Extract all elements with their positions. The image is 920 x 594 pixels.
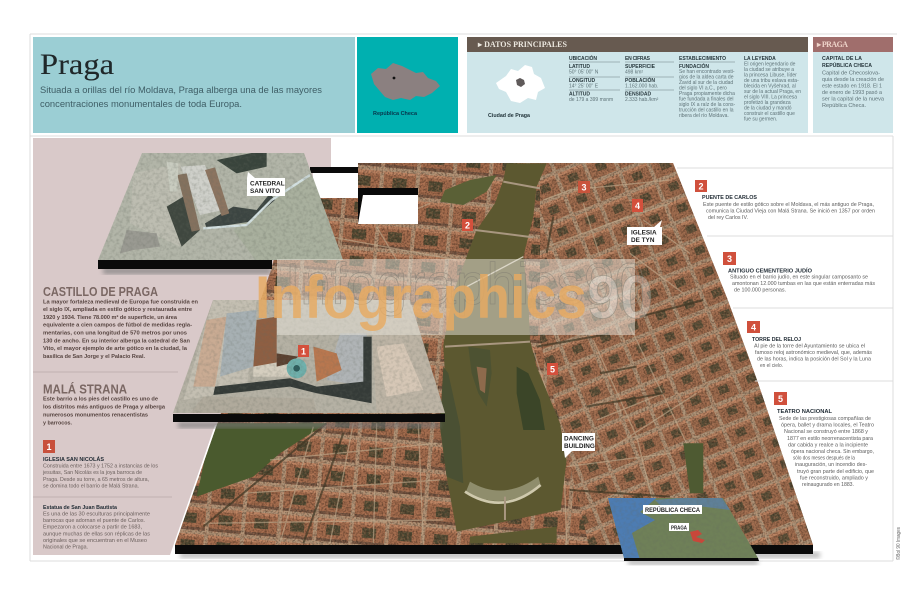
marker 1 on inset: 1 — [301, 346, 306, 356]
column: establecimiento: Zavid al sur de la ciudad — [679, 80, 733, 86]
label: República Checa — [643, 505, 702, 514]
body: Praga. Desde su torre, a 65 metros de altura, — [43, 477, 149, 483]
river Vltava — [440, 163, 567, 532]
label: Praga — [669, 523, 689, 532]
marker 2 — [695, 180, 707, 192]
column: establecimiento — [679, 56, 735, 119]
label: Catedral San Vito: CATEDRAL — [250, 180, 285, 188]
column: establecimiento: siglo IX a raíz de la cons- — [679, 102, 735, 108]
column: ubicación: ALTITUD — [569, 92, 590, 98]
column: ubicación: LONGITUD — [569, 78, 595, 84]
body: aunque muchas de ellas son réplicas de las — [43, 532, 150, 538]
body: Sede de las prestigiosas compañías de — [779, 416, 871, 422]
heading: Estatua de San Juan Bautista — [43, 505, 118, 511]
body — [754, 344, 872, 369]
label: Dancing Building: BUILDING — [564, 443, 595, 450]
text block: Torre del Reloj — [747, 321, 872, 369]
body text: este estado en 1918. El 1 — [822, 84, 882, 90]
body: de las horas, indica la posición del Sol y la Luna — [757, 356, 871, 362]
park — [197, 423, 327, 497]
column: la leyenda: la ciudad se atribuye a — [744, 67, 794, 73]
marker 1: 1 — [46, 442, 52, 452]
body — [42, 464, 158, 490]
column: establecimiento: ESTABLECIMIENTO — [679, 56, 726, 62]
column: ubicación: de 179 a 399 msnm — [569, 97, 613, 103]
column: en cifras: POBLACIÓN — [625, 76, 655, 84]
column: en cifras: 498 km² — [625, 70, 643, 76]
marker 2 — [462, 219, 473, 231]
intro text — [40, 85, 322, 110]
column: establecimiento: Se han encontrado vesti- — [679, 69, 735, 75]
bridges — [445, 182, 540, 520]
marker 2: 2 — [465, 220, 470, 230]
country label: República Checa — [373, 111, 418, 117]
map: city of Prague — [496, 65, 545, 103]
body: 1877 en estilo neorrenacentista para — [787, 436, 873, 442]
icon: Prague dot — [393, 77, 395, 79]
body: se domina todo el barrio de Malá Strana. — [43, 484, 139, 490]
label: Iglesia de Tyn: IGLESIA — [631, 230, 657, 236]
body: ópera nacional checa. Sin embargo, — [791, 449, 874, 455]
column: establecimiento: del siglo VI a.C., pero — [679, 86, 727, 92]
label: Dancing Building: DANCING — [564, 436, 594, 442]
column: ubicación: UBICACIÓN — [569, 54, 597, 62]
column: establecimiento: Praga propiamente dicha — [679, 91, 735, 97]
column: ubicación — [569, 54, 620, 103]
body: los distritos más antiguos de Praga y alberga — [43, 404, 166, 410]
column: la leyenda: el siglo VIII. La princesa — [744, 94, 797, 100]
column: en cifras: DENSIDAD — [625, 92, 652, 98]
islands — [468, 347, 492, 407]
marker 1 on inset — [298, 345, 309, 357]
inset shadow — [103, 268, 271, 274]
column: establecimiento: FUNDACIÓN — [679, 62, 709, 70]
map: Czech Republic — [371, 63, 440, 100]
body: mentarias, con una longitud de 570 metros por unos — [43, 330, 187, 336]
column: en cifras — [625, 56, 674, 103]
text block: Antiguo Cementerio Judío — [723, 252, 875, 294]
white strip cut-out — [310, 167, 358, 198]
body: originales que se encuentran en el Museo — [43, 538, 147, 544]
body: inauguración, un incendio des- — [795, 462, 867, 468]
marker 3 — [578, 181, 590, 193]
body text: Capital de Checoslova- — [822, 70, 880, 76]
body: jesuitas, San Nicolás es la joya barroca de — [42, 470, 142, 476]
marker 5: 5 — [778, 394, 783, 404]
label: República Checa: REPÚBLICA CHECA — [645, 507, 701, 514]
label: Dancing Building — [562, 433, 595, 458]
body: famoso reloj astronómico medieval, que, además — [755, 350, 872, 356]
column: en cifras: SUPERFICIE — [625, 64, 656, 70]
watermark band — [277, 259, 635, 335]
column: la leyenda: de la ciudad y mandó — [744, 106, 792, 112]
panel: Praga capital — [813, 37, 893, 133]
heading: MALÁ STRANA — [43, 382, 128, 396]
title: Praga — [40, 48, 114, 81]
inset: mini map of Czech Republic — [608, 498, 760, 566]
heading: ANTIGUO CEMENTERIO JUDÍO — [728, 266, 813, 274]
map texture — [170, 160, 820, 550]
subheading: REPÚBLICA CHECA — [822, 62, 873, 69]
body — [703, 202, 875, 221]
body: Este barrio a los pies del castillo es uno de — [43, 396, 158, 402]
body text: de enero de 1993 pasó a — [822, 90, 883, 96]
heading: IGLESIA SAN NICOLÁS — [43, 456, 104, 463]
body: Es una de las 30 esculturas principalmente — [43, 512, 150, 518]
text block: Castillo de Praga — [43, 284, 199, 360]
body: sólo dos meses después de la — [793, 456, 855, 462]
body — [730, 274, 875, 294]
body: basílica de San Jorge y el Palacio Real. — [43, 354, 145, 360]
body: Empezaron a colocarse a partir de 1683, — [43, 524, 142, 530]
body: dar cabida y realce a la incipiente — [788, 442, 868, 448]
label: Iglesia de Tyn — [627, 220, 662, 245]
body — [43, 512, 150, 550]
weir — [466, 477, 541, 501]
text block: Puente de Carlos — [695, 180, 875, 221]
heading: TORRE DEL RELOJ — [752, 337, 801, 343]
marker 3: 3 — [727, 254, 732, 264]
body: La mayor fortaleza medieval de Europa fue construida en — [43, 299, 199, 305]
marker 4 — [632, 199, 643, 212]
body: truyó gran parte del edificio, que — [797, 469, 874, 475]
body — [43, 396, 166, 426]
column: en cifras: 2.333 hab./km² — [625, 97, 659, 103]
inset shadow — [178, 422, 440, 428]
heading: CASTILLO DE PRAGA — [43, 284, 159, 299]
body text — [822, 70, 885, 109]
marker 4: 4 — [635, 201, 640, 211]
body: 1920 y 1934. Tiene 78.000 m² de superficie, un área — [43, 314, 178, 321]
heading: ▸ DATOS PRINCIPALES — [477, 40, 568, 49]
panel: left pink background — [33, 138, 331, 555]
inset base edge — [98, 260, 272, 269]
label: Catedral San Vito: SAN VITO — [250, 188, 280, 195]
white hole cut-out — [358, 188, 418, 224]
column: ubicación: LATITUD — [569, 64, 590, 70]
icon: Prague red area — [690, 530, 705, 543]
column: la leyenda: profetizó la grandeza — [744, 100, 791, 106]
body: Nacional se construyó entre 1868 y — [784, 429, 868, 435]
main aerial map of Prague — [170, 160, 820, 558]
body: equivalente a cien campos de fútbol de medidas regla- — [43, 323, 192, 329]
marker 4: 4 — [751, 322, 756, 332]
inset: Catedral San Vito — [90, 150, 350, 274]
body: y barrocos. — [43, 420, 72, 426]
column: la leyenda: de una tribu eslava esta- — [744, 78, 799, 84]
marker 3: 3 — [581, 182, 587, 192]
text block: Estatua de San Juan Bautista — [43, 505, 150, 550]
body: amontonan 12.000 tumbas en las que están enterradas más — [732, 281, 875, 287]
column: ubicación: 50° 05' 00'' N — [569, 70, 599, 76]
map shadow — [180, 552, 820, 558]
body: Construida entre 1673 y 1752 a instancias de los — [43, 464, 158, 470]
heading: ▸ PRAGA — [816, 40, 848, 49]
column: la leyenda: fue su germen. — [744, 116, 777, 122]
body: ópera, ballet y drama locales, el Teatro — [781, 423, 874, 429]
body text: quia desde la creación de — [822, 77, 884, 83]
column: la leyenda: construir el castillo que — [744, 111, 795, 117]
inset base edge — [173, 414, 445, 422]
column: la leyenda: blecida en Vyšehrad, al — [744, 84, 796, 90]
watermark ghost lettering: Infographics90 — [285, 252, 645, 317]
body: del rey Carlos IV. — [708, 215, 748, 221]
city streets — [203, 180, 697, 543]
column: la leyenda: la princesa Libuse, líder — [744, 72, 797, 78]
body: Vito, el mayor ejemplo de arte gótico en la ciudad, la — [43, 346, 188, 352]
panel: datos principales — [467, 37, 808, 133]
map caption: Ciudad de Praga — [488, 113, 531, 119]
body — [43, 299, 199, 360]
body: Este puente de estilo gótico sobre el Moldava, el más antiguo de Praga, — [703, 202, 874, 208]
body: el siglo IX, ampliada en estilo gótico y restaurada entre — [43, 307, 192, 313]
heading: PUENTE DE CARLOS — [702, 195, 757, 201]
column: en cifras: 1.162.000 hab. — [625, 84, 658, 90]
label: Praga: PRAGA — [671, 526, 687, 532]
label: Iglesia de Tyn: DE TYN — [631, 237, 655, 244]
body: comunica la Ciudad Vieja con Malá Strana. Se inició en 1357 por orden — [706, 208, 875, 214]
photo credit: ©Bol 90 Images — [895, 527, 902, 560]
text block: Iglesia San Nicolás — [42, 440, 158, 490]
text block: Malá Strana — [43, 382, 166, 426]
heading: TEATRO NACIONAL — [777, 409, 833, 415]
body: Situado en el barrio judío, en este singular camposanto se — [730, 274, 868, 280]
body: fue reconstruido, ampliado y — [800, 475, 868, 481]
inset base edge — [624, 558, 759, 561]
bank vegetation — [440, 367, 463, 483]
body text: ser la capital de la nueva — [822, 96, 885, 102]
body: en el cielo. — [760, 363, 783, 369]
marker 3 — [723, 252, 736, 265]
column: la leyenda: El origen legendario de — [744, 62, 796, 68]
body: barrocas que adornan el puente de Carlos. — [43, 518, 145, 524]
marker 2: 2 — [698, 182, 704, 192]
watermark — [255, 252, 653, 335]
map base edge — [175, 545, 813, 554]
body: Al pie de la torre del Ayuntamiento se ubica el — [754, 344, 865, 350]
column: la leyenda: LA LEYENDA — [744, 56, 776, 62]
panel: title header — [33, 37, 355, 133]
watermark number: 90 — [587, 264, 653, 331]
column: la leyenda — [744, 56, 801, 122]
column: establecimiento: gios de la aldea carta de — [679, 74, 734, 80]
column: la leyenda: sur de la actual Praga, en — [744, 89, 801, 95]
column: establecimiento: ribera del río Moldava. — [679, 113, 729, 119]
body: numerosos monumentos renacentistas — [43, 412, 148, 418]
body: 130 de ancho. En su interior alberga la catedral de San — [43, 338, 191, 344]
watermark main lettering: Infographics — [255, 264, 587, 331]
marker 5: 5 — [550, 364, 555, 374]
column: ubicación: 14° 25' 00'' E — [569, 84, 599, 90]
body text: República Checa. — [822, 103, 866, 109]
column: en cifras: EN CIFRAS — [625, 56, 651, 62]
body: de 100.000 personas. — [734, 288, 786, 294]
body: Nacional de Praga. — [43, 544, 88, 550]
marker 5 — [547, 363, 558, 375]
text block: Teatro Nacional — [774, 392, 874, 488]
subheading — [822, 56, 873, 69]
inset: Malá Strana — [170, 298, 450, 428]
intro text: Situada a orillas del río Moldava, Praga alberga una de las mayores — [40, 85, 322, 96]
column: establecimiento: fue fundada a finales del — [679, 96, 734, 102]
intro text: concentraciones monumentales de toda Europa. — [40, 99, 242, 110]
map: city centre — [516, 78, 525, 87]
panel: country locator — [357, 37, 458, 133]
body: reinaugurado en 1883. — [802, 482, 854, 488]
subheading: CAPITAL DE LA — [822, 56, 863, 62]
inset shadow — [628, 560, 758, 565]
column: establecimiento: trucción del castillo en la — [679, 108, 734, 114]
body — [779, 416, 874, 488]
label: Catedral San Vito — [247, 172, 285, 196]
